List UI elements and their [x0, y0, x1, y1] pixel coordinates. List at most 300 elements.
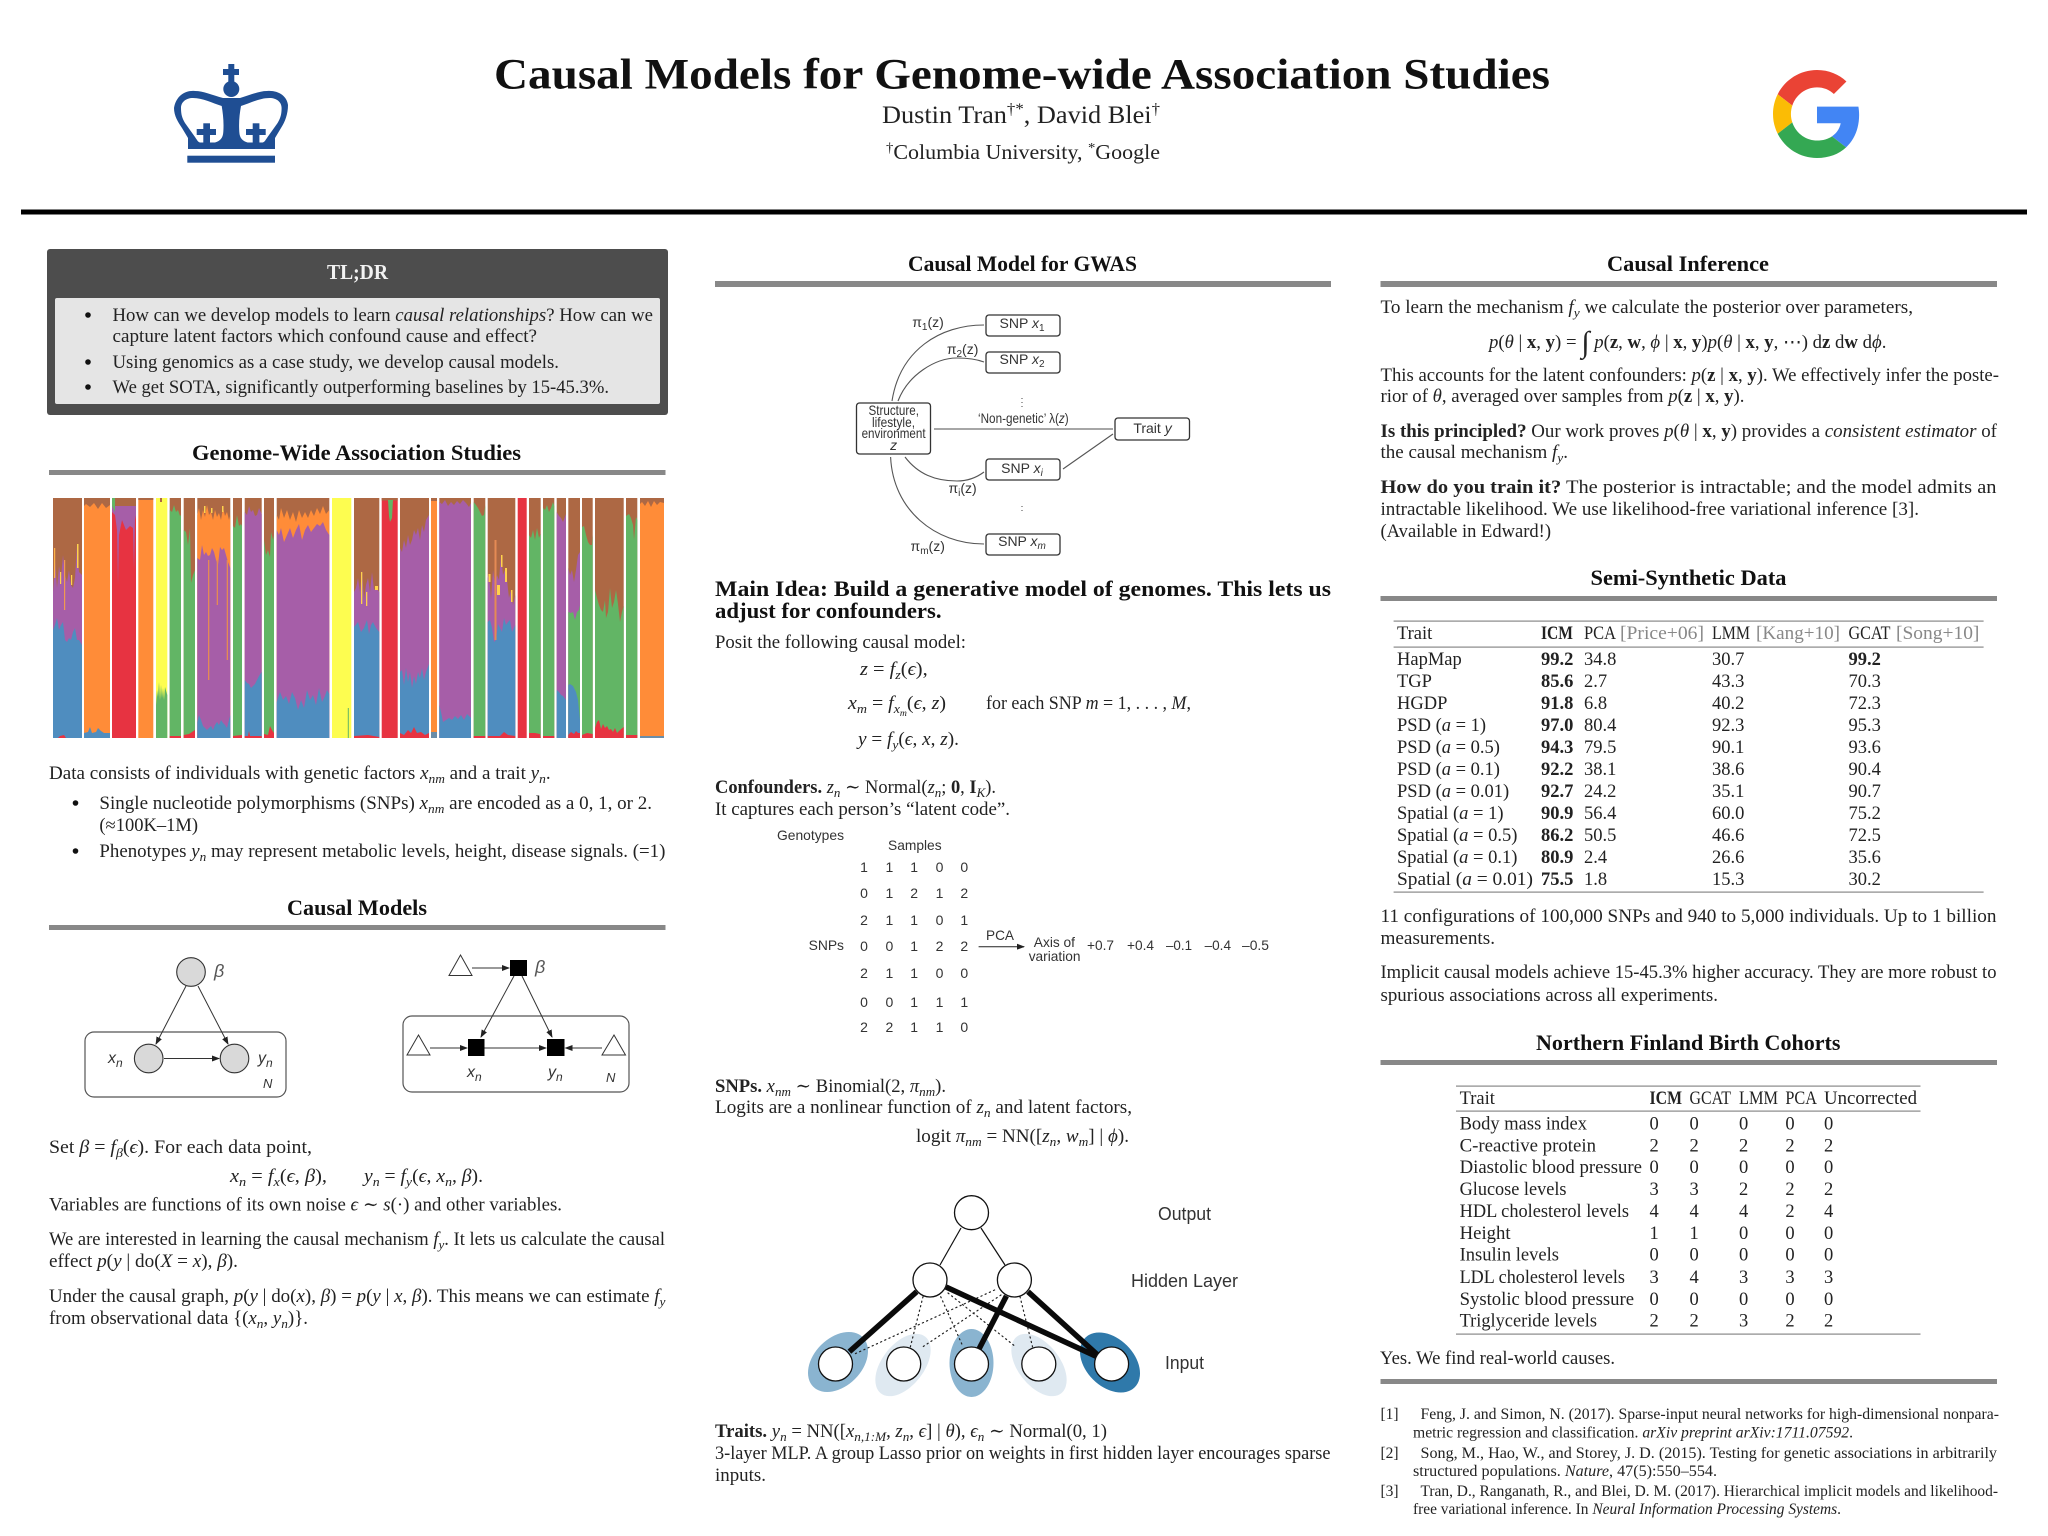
diagram: implicit causal model: N: [606, 1070, 616, 1085]
diagram: implicit causal model: x: [467, 1064, 475, 1081]
bullet list: SNPs and phenotypes: nm: [428, 801, 444, 816]
text block: causal model equations: z = f: [860, 660, 895, 680]
diagram: genotype matrix and PCA: 0: [886, 938, 894, 954]
diagram: genotype matrix and PCA: 1: [886, 885, 894, 901]
diagram: genotype matrix and PCA: 1: [936, 1019, 944, 1035]
intro text: Data consists of individuals with genetic factors x: [49, 764, 428, 784]
text block: SNPs: Logits are a nonlinear function of z: [715, 1098, 984, 1118]
table: NFBC results: 0: [1785, 1290, 1795, 1310]
table: semi-synthetic results: 30.7: [1712, 650, 1744, 670]
text block: traits: n: [780, 1429, 787, 1444]
diagram: genotype matrix and PCA: 0: [960, 965, 968, 981]
reference 2: Song, M., Hao, W., and Storey, J. D. (2015). Testing for genetic associations in arbitrarily: [1420, 1445, 1997, 1462]
table: semi-synthetic results: 92.7: [1541, 782, 1573, 802]
text block: structural equations: n: [445, 1174, 452, 1189]
text block: traits: = NN([: [787, 1422, 846, 1442]
table: NFBC results: [1456, 1086, 1920, 1335]
text block: experiment summary: spurious associations across all experiments.: [1380, 986, 1718, 1006]
affiliations: Google: [1095, 140, 1160, 164]
text block: posterior: ∫: [1579, 326, 1591, 361]
table: semi-synthetic results: 80.9: [1541, 848, 1573, 868]
table: NFBC results: 0: [1824, 1114, 1833, 1134]
text block: structural equations: We are interested in learning the causal mechanism f: [49, 1230, 438, 1250]
header: [174, 52, 1859, 164]
table: NFBC results: 0: [1785, 1114, 1795, 1134]
diagram: genotype matrix and PCA: 0: [886, 994, 894, 1010]
affiliations: Columbia University,: [893, 140, 1088, 164]
diagram: neural network with group lasso: [796, 1196, 1238, 1406]
text block: structural equations: n: [257, 1316, 263, 1331]
table: NFBC results: Height: [1460, 1224, 1511, 1244]
text block: confounders: n: [834, 785, 840, 800]
diagram: genotype matrix and PCA: 2: [910, 885, 918, 901]
text block: SNPs: ).: [935, 1077, 946, 1097]
table: semi-synthetic results: 72.5: [1848, 826, 1881, 846]
text block: structural equations: effect p(y | do(X = x), β).: [49, 1252, 238, 1272]
diagram: GWAS causal graph: SNP x: [1000, 351, 1039, 367]
diagram: genotype matrix and PCA: 1: [936, 885, 944, 901]
text block: causal model equations: ϵ, z): [914, 694, 946, 714]
table: semi-synthetic results: 35.6: [1848, 848, 1881, 868]
diagram: genotype matrix and PCA: 1: [910, 859, 918, 875]
text block: posterior: Is this principled? Our work proves p(θ | x, y) provides a consistent estimator of: [1380, 422, 1998, 442]
text block: posterior: we calculate the posterior over parameters,: [1580, 298, 1913, 318]
TL;DR bullet list: How can we develop models to learn causal relationships? How can we: [112, 306, 653, 326]
table: semi-synthetic results: 99.2: [1541, 650, 1573, 670]
table: semi-synthetic results: 6.8: [1584, 694, 1607, 714]
table: NFBC results: 3: [1650, 1180, 1659, 1200]
table: semi-synthetic results: 15.3: [1712, 870, 1744, 890]
text block: causal model equations: ϵ),: [908, 660, 927, 680]
text block: causal model equations: z: [894, 667, 901, 682]
table: NFBC results: 0: [1650, 1158, 1659, 1178]
table: semi-synthetic results: 90.4: [1848, 760, 1881, 780]
table: NFBC results: 0: [1739, 1158, 1748, 1178]
reference 1: [1]: [1380, 1406, 1399, 1423]
table: NFBC results: 2: [1785, 1202, 1795, 1222]
diagram: GWAS causal graph: 2: [956, 349, 962, 360]
authors: †: [1152, 101, 1160, 118]
TL;DR bullet list: Using genomics as a case study, we develop causal models.: [112, 353, 559, 373]
diagram: GWAS causal graph: π: [947, 341, 956, 357]
table: NFBC results: 0: [1785, 1158, 1795, 1178]
diagram: genotype matrix and PCA: +0.4: [1127, 937, 1154, 953]
text block: causal model equations: =: [867, 694, 888, 714]
reference 2: [2]: [1380, 1445, 1399, 1462]
text block: posterior: This accounts for the latent confounders: p(z | x, y). We effectively infer the poste-: [1380, 366, 1999, 386]
diagram: GWAS causal graph: i: [958, 488, 960, 499]
table: NFBC results: 0: [1824, 1158, 1833, 1178]
bullet list: SNPs and phenotypes: [73, 794, 665, 864]
table: NFBC results: 0: [1690, 1114, 1699, 1134]
text block: confounders: It captures each person’s “latent code”.: [715, 800, 1010, 820]
diagram: genotype matrix and PCA: [777, 827, 1269, 1035]
table: semi-synthetic results: 60.0: [1712, 804, 1744, 824]
table: NFBC results: 0: [1650, 1290, 1659, 1310]
text block: structural equations: . It lets us calculate the causal: [444, 1230, 665, 1250]
reference 1: metric regression and classification. arXiv preprint arXiv:1711.07592.: [1413, 1425, 1853, 1442]
text block: structural equations: n: [373, 1174, 380, 1189]
title: Causal Models for Genome-wide Association Studies: [494, 52, 1550, 98]
text block: posterior: the causal mechanism f: [1380, 443, 1557, 463]
chart: ancestry stacked bars: [53, 498, 664, 738]
diagram: genotype matrix and PCA: 1: [910, 912, 918, 928]
text block: SNPs: ∼ Binomial(2,: [791, 1077, 910, 1097]
table: semi-synthetic results: Spatial (a = 0.5): [1397, 826, 1517, 846]
diagram: GWAS causal graph: (z): [929, 538, 945, 554]
text block: structural equations: y: [404, 1174, 412, 1189]
diagram: GWAS causal graph: z: [889, 437, 897, 453]
text block: SNPs: = NN([: [982, 1127, 1042, 1147]
table: semi-synthetic results: 80.4: [1584, 716, 1616, 736]
icon: Columbia crown logo: [174, 64, 288, 163]
diagram: GWAS causal graph: ‘Non-genetic’ λ(z): [978, 410, 1069, 426]
table: NFBC results: 0: [1690, 1246, 1699, 1266]
text block: SNPs: [715, 1077, 1132, 1149]
table: semi-synthetic results: ICM: [1541, 624, 1573, 644]
text block: confounders: ∼ Normal(: [840, 778, 928, 798]
panel: Northern Finland Birth Cohorts: [1380, 1030, 1997, 1384]
table: semi-synthetic results: 46.6: [1712, 826, 1744, 846]
table: semi-synthetic results: 56.4: [1584, 804, 1616, 824]
diagram: implicit causal model: n: [475, 1070, 482, 1084]
diagram: genotype matrix and PCA: 1: [886, 912, 894, 928]
intro text: n: [539, 771, 546, 786]
diagram: neural network with group lasso: Hidden Layer: [1131, 1271, 1238, 1291]
text block: causal model equations: x: [847, 694, 858, 714]
table: NFBC results: Glucose levels: [1460, 1180, 1566, 1200]
table: NFBC results: 2: [1785, 1180, 1795, 1200]
panel: Causal Models: [49, 895, 666, 1331]
diagram: neural network with group lasso: Input: [1165, 1353, 1204, 1373]
diagram: GWAS causal graph: SNP x: [1001, 460, 1041, 476]
text block: SNPs: nm: [775, 1084, 791, 1099]
table: NFBC results: 2: [1739, 1136, 1748, 1156]
text block: SNPs: SNPs. x: [715, 1077, 775, 1097]
table: semi-synthetic results: Spatial (a = 0.1): [1397, 848, 1517, 868]
heading: Causal Inference: [1607, 251, 1769, 276]
text block: experiment summary: Implicit causal models achieve 15-45.3% higher accuracy. They are more robust to: [1380, 963, 1996, 983]
table: NFBC results: HDL cholesterol levels: [1460, 1202, 1629, 1222]
text block: SNPs: w: [1066, 1127, 1079, 1147]
reference 2: structured populations. Nature, 47(5):550–554.: [1413, 1463, 1717, 1480]
table: semi-synthetic results: Spatial (a = 1): [1397, 804, 1504, 824]
text block: SNPs: n: [984, 1105, 991, 1120]
text block: SNPs: and latent factors,: [991, 1098, 1132, 1118]
table: semi-synthetic results: [Song+10]: [1896, 624, 1979, 644]
diagram: Bayesian network: N: [263, 1076, 273, 1091]
table: semi-synthetic results: HGDP: [1397, 694, 1447, 714]
text block: structural equations: ϵ, β),: [287, 1167, 326, 1187]
table: semi-synthetic results: 92.3: [1712, 716, 1744, 736]
diagram: GWAS causal graph: [856, 314, 1190, 557]
diagram: GWAS causal graph: (z): [962, 341, 978, 357]
table: NFBC results: 2: [1824, 1136, 1833, 1156]
table: semi-synthetic results: TGP: [1397, 672, 1432, 692]
table: NFBC results: Body mass index: [1460, 1114, 1588, 1134]
diagram: genotype matrix and PCA: 1: [860, 859, 868, 875]
text block: causal model equations: (: [901, 660, 908, 680]
text block: structural equations: ϵ). For each data point,: [130, 1138, 300, 1158]
text block: structural equations: y: [658, 1294, 666, 1309]
text block: structural equations: Variables are functions of its own noise ϵ ∼ s(·) and other variables.: [49, 1196, 562, 1216]
table: semi-synthetic results: 90.1: [1712, 738, 1744, 758]
text block: causal model equations: y = f: [858, 730, 892, 750]
table: semi-synthetic results: 1.8: [1584, 870, 1607, 890]
text block: causal model equations: ϵ, x, z).: [905, 730, 959, 750]
main idea statement: adjust for confounders.: [715, 598, 942, 623]
table: semi-synthetic results: 92.2: [1541, 760, 1573, 780]
text block: SNPs: m: [1079, 1134, 1088, 1149]
main idea statement: [715, 576, 1331, 623]
diagram: genotype matrix and PCA: SNPs: [809, 937, 844, 953]
text block: causal model equations: y: [890, 737, 899, 752]
heading: Genome-Wide Association Studies: [192, 440, 521, 465]
text block: SNPs: nm: [919, 1084, 935, 1099]
text block: traits: n: [978, 1429, 984, 1444]
text block: traits: z: [894, 1422, 903, 1442]
table: semi-synthetic results: 91.8: [1541, 694, 1573, 714]
table: semi-synthetic results: 72.3: [1848, 694, 1881, 714]
table: NFBC results: 2: [1824, 1312, 1833, 1332]
table: semi-synthetic results: GCAT: [1848, 624, 1890, 644]
table: NFBC results: 0: [1690, 1290, 1699, 1310]
text block: structural equations: n: [239, 1174, 246, 1189]
table: semi-synthetic results: 38.6: [1712, 760, 1744, 780]
table: NFBC results: 3: [1650, 1268, 1659, 1288]
table: NFBC results: Diastolic blood pressure: [1460, 1158, 1642, 1178]
text block: posterior: To learn the mechanism f: [1380, 298, 1574, 318]
conclusion text: Yes. We find real-world causes.: [1380, 1349, 1615, 1369]
table: NFBC results: 2: [1824, 1180, 1833, 1200]
table: semi-synthetic results: 85.6: [1541, 672, 1573, 692]
diagram: Bayesian network: n: [266, 1056, 273, 1070]
table: semi-synthetic results: 70.3: [1848, 672, 1881, 692]
table: semi-synthetic results: 26.6: [1712, 848, 1744, 868]
diagram: genotype matrix and PCA: 0: [860, 885, 868, 901]
diagram: implicit causal model: y: [548, 1064, 556, 1081]
text block: causal model equations: f: [888, 694, 897, 714]
diagram: genotype matrix and PCA: –0.1: [1166, 937, 1192, 953]
table: semi-synthetic results: 90.9: [1541, 804, 1573, 824]
diagram: implicit causal model: [403, 955, 629, 1092]
table: NFBC results: 2: [1690, 1312, 1699, 1332]
table: semi-synthetic results: 99.2: [1848, 650, 1881, 670]
text block: traits: 3-layer MLP. A group Lasso prior on weights in first hidden layer encourages sparse: [715, 1444, 1330, 1464]
diagram: implicit causal model: n: [556, 1070, 563, 1084]
reference 3: [3]: [1380, 1483, 1399, 1500]
table: NFBC results: 2: [1650, 1136, 1659, 1156]
table: NFBC results: 0: [1650, 1114, 1659, 1134]
text block: SNPs: ,: [1056, 1127, 1066, 1147]
table: semi-synthetic results: Trait: [1397, 624, 1433, 644]
text block: SNPs: π: [910, 1077, 920, 1097]
table: semi-synthetic results: [Price+06]: [1620, 624, 1704, 644]
diagram: GWAS causal graph: π: [911, 538, 920, 554]
panel: Causal Model for GWAS: [715, 251, 1331, 1486]
text block: traits: ,: [909, 1422, 919, 1442]
text block: posterior: [1380, 298, 1999, 542]
diagram: Bayesian network: n: [116, 1056, 123, 1070]
diagram: GWAS causal graph: (z): [960, 480, 977, 496]
bullet list: SNPs and phenotypes: Single nucleotide polymorphisms (SNPs) x: [99, 794, 428, 814]
table: NFBC results: GCAT: [1690, 1089, 1731, 1109]
diagram: genotype matrix and PCA: 1: [910, 1019, 918, 1035]
table: NFBC results: 3: [1739, 1312, 1748, 1332]
text block: traits: x: [845, 1422, 855, 1442]
TL;DR bullet list: capture latent factors which confound cause and effect?: [112, 327, 537, 347]
table: semi-synthetic results: PSD (a = 0.01): [1397, 782, 1509, 802]
table: semi-synthetic results: 38.1: [1584, 760, 1616, 780]
panel: Genome-Wide Association Studies: [49, 440, 666, 864]
text block: confounders: 0, I: [951, 778, 977, 798]
heading: Causal Models: [287, 895, 427, 920]
bullet list: SNPs and phenotypes: n: [200, 849, 206, 864]
text block: traits: ∼ Normal(0, 1): [984, 1422, 1107, 1442]
panel: TL;DR: [47, 249, 668, 415]
diagram: GWAS causal graph: (z): [927, 314, 944, 330]
intro text: and a trait: [445, 764, 531, 784]
intro text: .: [546, 764, 551, 784]
table: NFBC results: 0: [1739, 1246, 1748, 1266]
text block: structural equations: β).: [462, 1167, 482, 1187]
intro text: nm: [429, 771, 445, 786]
table: semi-synthetic results: PCA: [1584, 624, 1617, 644]
diagram: Bayesian network: [85, 958, 286, 1097]
table: semi-synthetic results: 90.7: [1848, 782, 1881, 802]
text block: structural equations: [49, 1138, 666, 1331]
diagram: GWAS causal graph: SNP x: [998, 533, 1038, 549]
diagram: genotype matrix and PCA: 1: [960, 912, 968, 928]
diagram: genotype matrix and PCA: 1: [910, 965, 918, 981]
table: NFBC results: 4: [1690, 1268, 1699, 1288]
table: NFBC results: 2: [1785, 1136, 1795, 1156]
table: NFBC results: 0: [1739, 1224, 1748, 1244]
text block: posterior: How do you train it? The posterior is intractable; and the model admits an: [1380, 478, 1996, 498]
affiliations: †: [886, 141, 893, 156]
text block: experiment summary: 11 configurations of 100,000 SNPs and 940 to 5,000 individuals. Up to 1 billion: [1380, 907, 1996, 927]
table: NFBC results: 4: [1650, 1202, 1659, 1222]
table: NFBC results: 0: [1650, 1246, 1659, 1266]
table: semi-synthetic results: 30.2: [1848, 870, 1881, 890]
text block: structural equations: from observational data {(x: [49, 1309, 257, 1329]
text block: structural equations: ,: [452, 1167, 462, 1187]
authors: †*: [1007, 101, 1024, 118]
bullet list: SNPs and phenotypes: may represent metabolic levels, height, disease signals. (=1): [206, 842, 665, 862]
diagram: genotype matrix and PCA: 0: [936, 912, 944, 928]
diagram: genotype matrix and PCA: Axis of: [1034, 934, 1075, 950]
text block: confounders: [715, 778, 1010, 820]
diagram: genotype matrix and PCA: Genotypes: [777, 827, 844, 843]
table: NFBC results: 0: [1739, 1290, 1748, 1310]
diagram: genotype matrix and PCA: 2: [886, 1019, 894, 1035]
text block: structural equations: β: [115, 1145, 123, 1160]
table: NFBC results: 1: [1690, 1224, 1699, 1244]
diagram: genotype matrix and PCA: 2: [936, 938, 944, 954]
TL;DR bullet list: We get SOTA, significantly outperforming baselines by 15-45.3%.: [112, 378, 609, 398]
table: semi-synthetic results: 34.8: [1584, 650, 1616, 670]
text block: traits: ϵ] | θ), ϵ: [919, 1422, 978, 1442]
text block: structural equations: Under the causal graph, p(y | do(x), β) = p(y | x, β). This means we can estimate f: [49, 1287, 659, 1307]
text block: structural equations: (: [280, 1167, 287, 1187]
diagram: neural network with group lasso: Output: [1158, 1204, 1211, 1224]
table: NFBC results: 0: [1824, 1290, 1833, 1310]
diagram: genotype matrix and PCA: –0.5: [1242, 937, 1269, 953]
text block: structural equations: x: [229, 1167, 240, 1187]
diagram: GWAS causal graph: 2: [1039, 359, 1045, 370]
table: semi-synthetic results: 93.6: [1848, 738, 1881, 758]
diagram: Bayesian network: β: [213, 961, 224, 981]
diagram: GWAS causal graph: π: [912, 314, 922, 330]
table: semi-synthetic results: 94.3: [1541, 738, 1573, 758]
text block: causal model equations: (: [898, 730, 905, 750]
text block: confounders: z: [927, 778, 935, 798]
text block: SNPs: ϕ).: [1108, 1127, 1129, 1147]
table: semi-synthetic results: PSD (a = 0.1): [1397, 760, 1500, 780]
text block: causal model equations: Posit the following causal model:: [715, 633, 966, 653]
diagram: genotype matrix and PCA: Samples: [888, 837, 942, 853]
diagram: genotype matrix and PCA: 2: [860, 912, 868, 928]
text block: confounders: ;: [941, 778, 951, 798]
table: NFBC results: LDL cholesterol levels: [1460, 1268, 1625, 1288]
icon: Google G logo: [1773, 70, 1859, 158]
bullet list: SNPs and phenotypes: are encoded as a 0, 1, or 2.: [444, 794, 652, 814]
diagram: GWAS causal graph: 1: [1039, 323, 1045, 334]
diagram: genotype matrix and PCA: variation: [1029, 948, 1080, 964]
table: NFBC results: 2: [1650, 1312, 1659, 1332]
text block: experiment summary: [1380, 907, 1996, 1006]
affiliations: *: [1088, 141, 1095, 156]
table: NFBC results: Triglyceride levels: [1460, 1312, 1597, 1332]
table: NFBC results: 3: [1690, 1180, 1699, 1200]
table: NFBC results: 0: [1739, 1114, 1748, 1134]
table: semi-synthetic results: LMM: [1712, 624, 1750, 644]
text block: traits: inputs.: [715, 1466, 766, 1486]
table: semi-synthetic results: 40.2: [1712, 694, 1744, 714]
diagram: genotype matrix and PCA: 2: [960, 938, 968, 954]
diagram: GWAS causal graph: lifestyle,: [872, 414, 915, 430]
panel: references: [1380, 1406, 1999, 1518]
heading: TL;DR: TL;DR: [327, 260, 389, 284]
table: NFBC results: 2: [1739, 1180, 1748, 1200]
table: NFBC results: 0: [1690, 1158, 1699, 1178]
diagram: genotype matrix and PCA: 2: [860, 1019, 868, 1035]
table: NFBC results: 3: [1785, 1268, 1795, 1288]
diagram: implicit causal model: β: [534, 957, 545, 977]
text block: causal model equations: x: [893, 701, 900, 716]
table: NFBC results: Uncorrected: [1824, 1089, 1918, 1109]
table: semi-synthetic results: 2.7: [1584, 672, 1607, 692]
diagram: GWAS causal graph: Structure,: [868, 402, 919, 418]
table: NFBC results: 0: [1824, 1246, 1833, 1266]
diagram: genotype matrix and PCA: 2: [960, 885, 968, 901]
table: NFBC results: 4: [1690, 1202, 1699, 1222]
diagram: genotype matrix and PCA: 0: [960, 859, 968, 875]
table: semi-synthetic results: 75.2: [1848, 804, 1881, 824]
text block: SNPs: nm: [965, 1134, 982, 1149]
diagram: genotype matrix and PCA: 1: [910, 994, 918, 1010]
table: NFBC results: C-reactive protein: [1460, 1136, 1596, 1156]
text block: structural equations: (: [412, 1167, 419, 1187]
table: semi-synthetic results: 86.2: [1541, 826, 1573, 846]
table: NFBC results: 1: [1650, 1224, 1659, 1244]
table: NFBC results: 3: [1824, 1268, 1833, 1288]
reference 2: [1380, 1445, 1997, 1480]
text block: structural equations: y: [271, 1309, 282, 1329]
diagram: genotype matrix and PCA: PCA: [986, 927, 1015, 943]
table: semi-synthetic results: PSD (a = 0.5): [1397, 738, 1500, 758]
table: semi-synthetic results: 50.5: [1584, 826, 1616, 846]
